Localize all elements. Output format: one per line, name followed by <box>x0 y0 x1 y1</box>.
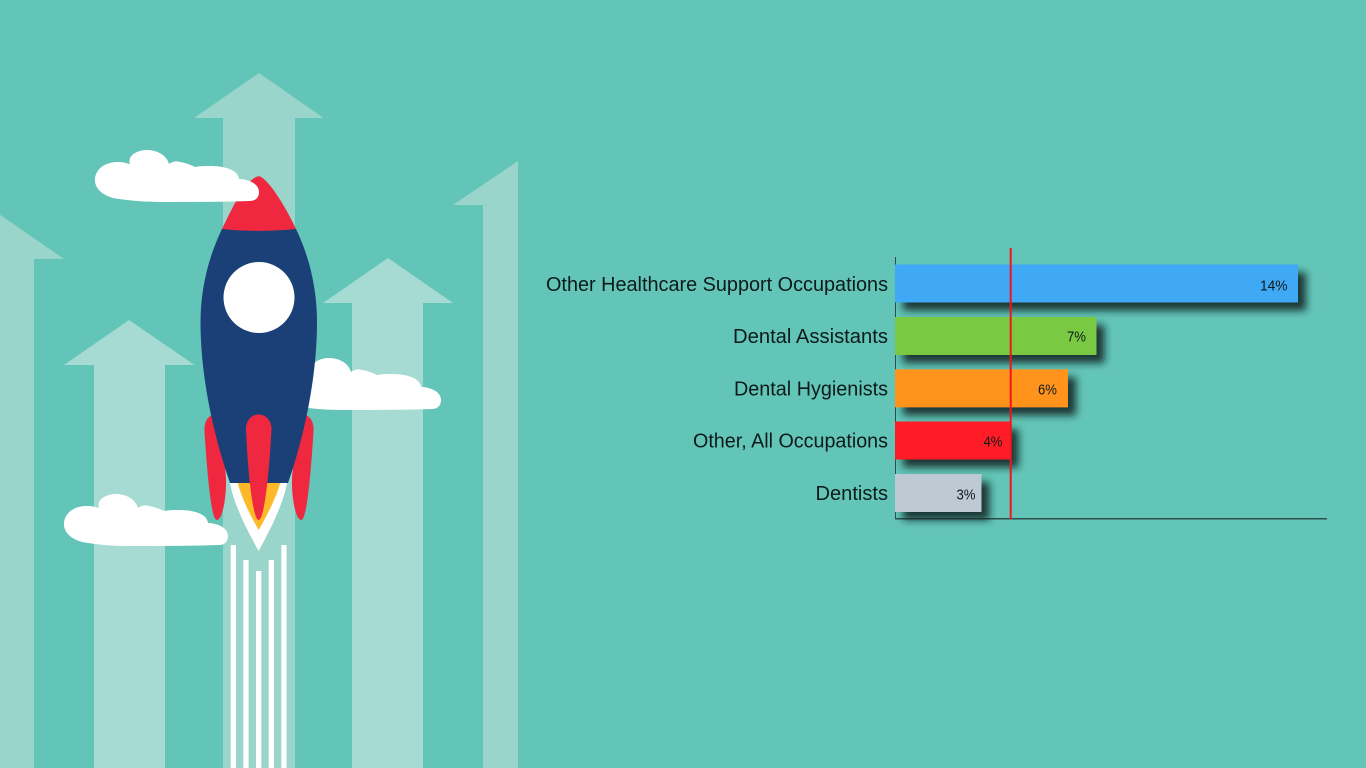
axes <box>895 257 1327 520</box>
porthole <box>224 262 294 333</box>
category labels <box>546 274 888 505</box>
flame outer <box>230 480 288 551</box>
reference line <box>1010 248 1012 519</box>
category labels: Dental Assistants <box>733 326 888 348</box>
cloud: top left <box>95 150 259 202</box>
bar: Other, All Occupations <box>895 422 1010 460</box>
category labels: Dental Hygienists <box>734 378 888 400</box>
value labels: 3% <box>956 488 976 504</box>
arrow: right <box>323 258 453 768</box>
bar: Dental Hygienists <box>895 369 1068 407</box>
left fin <box>204 415 226 520</box>
bar: Other Healthcare Support Occupations <box>895 264 1298 302</box>
rocket <box>200 176 317 768</box>
arrow: far right clipped <box>453 161 518 768</box>
value labels: 14% <box>1260 279 1288 295</box>
right fin <box>292 415 314 520</box>
cloud: bottom left <box>64 494 228 546</box>
bar chart <box>546 248 1327 520</box>
cloud: behind rocket <box>277 358 441 410</box>
bar: Dentists <box>895 474 982 512</box>
value labels <box>956 279 1288 504</box>
value labels: 6% <box>1038 382 1057 398</box>
centre fin <box>246 414 272 520</box>
background arrows <box>0 73 518 768</box>
arrow: left <box>64 320 194 768</box>
category labels: Other, All Occupations <box>693 430 888 452</box>
value labels: 7% <box>1067 330 1086 346</box>
bar: Dental Assistants <box>895 317 1096 355</box>
rocket body <box>200 229 317 483</box>
arrow: far left <box>0 214 64 768</box>
category labels: Other Healthcare Support Occupations <box>546 274 888 296</box>
value labels: 4% <box>984 434 1003 450</box>
exhaust stripes <box>231 545 287 768</box>
nose cone <box>222 176 296 231</box>
arrow: centre tall <box>194 73 324 768</box>
flame inner <box>237 480 281 530</box>
category labels: Dentists <box>816 483 888 505</box>
